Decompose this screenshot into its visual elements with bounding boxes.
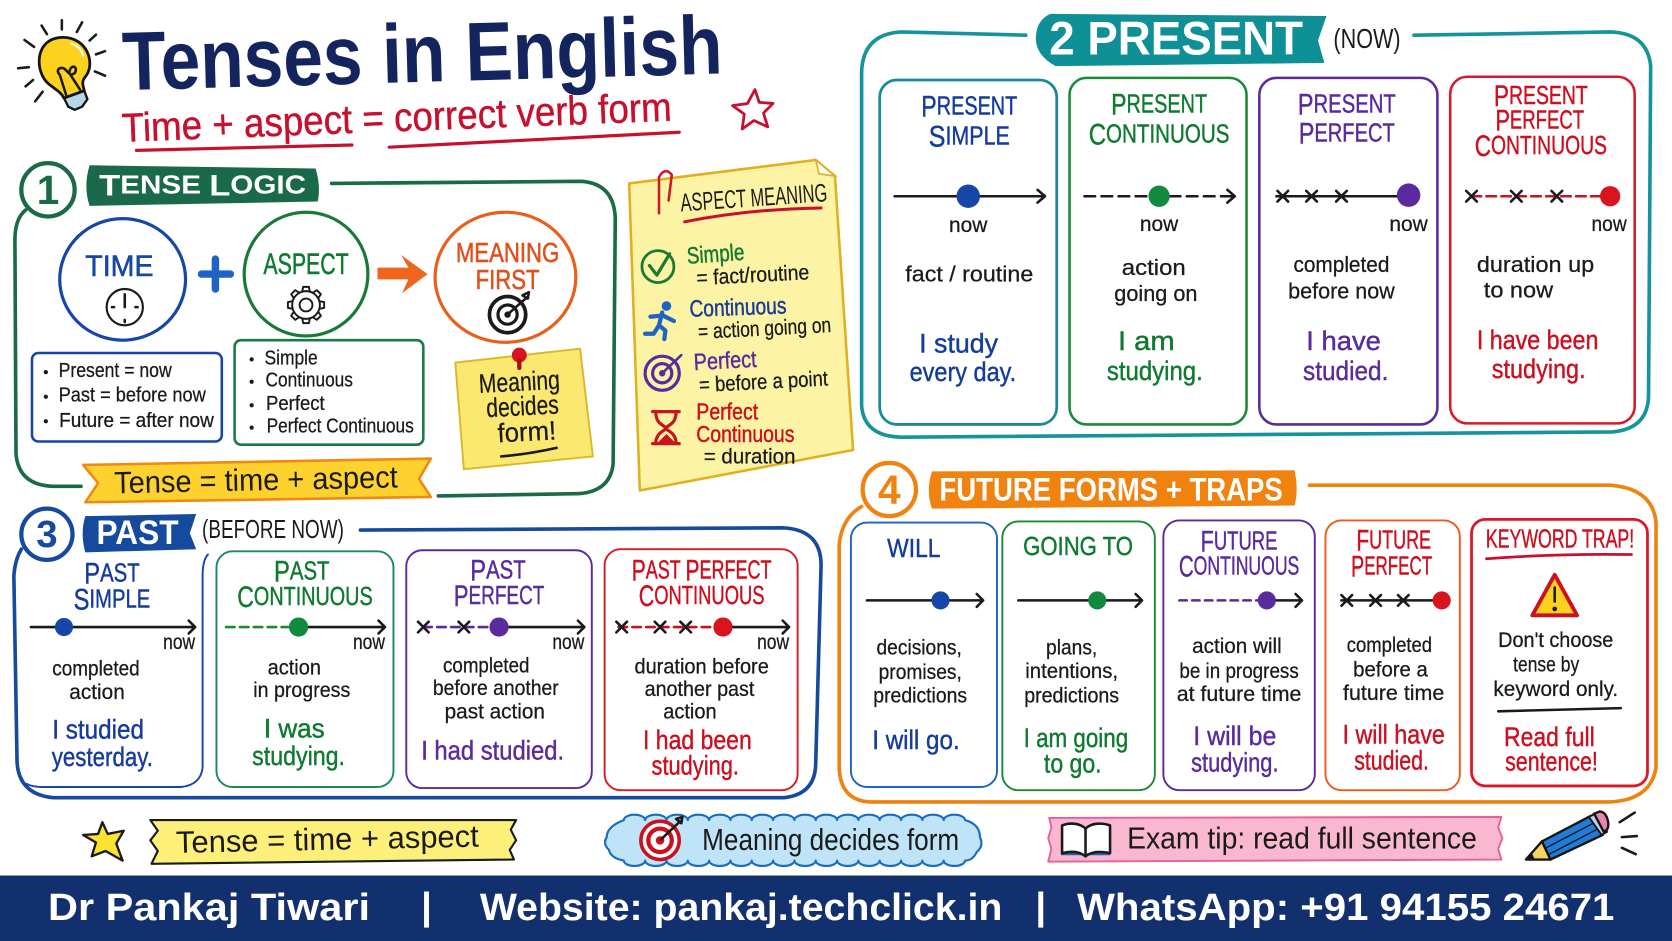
- box: aspect list: [235, 340, 423, 445]
- icon: plus: [202, 259, 230, 289]
- card: going to: to go.: [1044, 749, 1102, 779]
- card: going to: intentions,: [1025, 659, 1118, 683]
- card: keyword trap: Don't choose: [1498, 628, 1613, 652]
- item: perfect: Perfect: [693, 346, 758, 375]
- card: present continuous: going on: [1114, 281, 1197, 306]
- number badge 1: [21, 163, 75, 216]
- footer bar: |: [1035, 885, 1046, 928]
- badge and heading: past: [21, 509, 344, 560]
- card: past simple: I studied: [52, 714, 144, 744]
- card: present perfect: now: [1389, 212, 1428, 236]
- badge: 4: 4: [878, 466, 901, 512]
- card: past continuous: PAST: [274, 555, 330, 588]
- card: present perfect: studied.: [1303, 356, 1388, 386]
- card: present perfect continuous: to now: [1484, 278, 1554, 303]
- card: future perfect: FUTURE: [1356, 524, 1431, 557]
- card: future continuous: action will: [1192, 634, 1282, 658]
- heading: future forms and traps: FUTURE FORMS + TRAPS: [939, 471, 1283, 507]
- heading: aspect meaning: ASPECT MEANING: [680, 179, 828, 217]
- panel: tense logic: [15, 163, 615, 502]
- card: will: promises,: [879, 660, 962, 684]
- card: keyword trap: [1472, 519, 1647, 786]
- badge and heading: past: 3: [36, 513, 58, 556]
- card: future perfect: studied.: [1354, 745, 1429, 775]
- number badge 1: 1: [37, 167, 59, 213]
- card: past perfect: [406, 550, 592, 788]
- card: present perfect continuous: PRESENT: [1494, 79, 1588, 112]
- footer bar: Dr Pankaj Tiwari: [48, 886, 370, 929]
- card: future perfect: I will have: [1343, 720, 1445, 750]
- card: present perfect: PERFECT: [1299, 117, 1395, 150]
- badge: 4: [863, 463, 916, 516]
- icon: open book: [1061, 824, 1110, 856]
- card: keyword trap: sentence!: [1505, 746, 1598, 776]
- footer bar: WhatsApp: +91 94155 24671: [1077, 886, 1614, 929]
- footer bar: Website: pankaj.techclick.in: [480, 886, 1002, 929]
- circle: aspect: ASPECT: [263, 248, 349, 281]
- ribbon: tense reminder: Tense = time + aspect: [176, 819, 480, 860]
- card: past continuous: CONTINUOUS: [237, 581, 373, 614]
- box: aspect list: Perfect: [266, 393, 325, 415]
- card: will: decisions,: [877, 635, 962, 659]
- card: future continuous: FUTURE: [1201, 525, 1277, 558]
- card: present perfect: completed: [1293, 252, 1389, 277]
- item: perfect: [645, 346, 829, 397]
- card: present continuous: action: [1122, 255, 1186, 280]
- icon: target: [641, 817, 682, 860]
- item: simple: Simple: [686, 239, 745, 269]
- item: continuous: [645, 292, 832, 344]
- card: present simple: PRESENT: [921, 90, 1018, 123]
- card: future continuous: CONTINUOUS: [1179, 550, 1299, 583]
- icon: yellow star: [83, 822, 124, 861]
- sticky note: meaning decides form: [455, 348, 593, 469]
- banner: tense equals time plus aspect: Tense = time + aspect: [114, 459, 398, 500]
- card: will: WILL: [887, 535, 941, 563]
- card: keyword trap: keyword only.: [1493, 677, 1618, 701]
- label: now: (NOW): [1333, 23, 1401, 54]
- card: present continuous: now: [1140, 212, 1179, 236]
- card: present continuous: [1070, 78, 1247, 424]
- item: perfect continuous: Continuous: [696, 421, 794, 447]
- card: future perfect: before a: [1353, 658, 1428, 682]
- card: present perfect: before now: [1288, 279, 1396, 304]
- card: past perfect: past action: [445, 699, 545, 723]
- item: simple: [642, 239, 810, 290]
- card: past continuous: studying.: [252, 741, 345, 771]
- panel: present: [862, 12, 1651, 437]
- card: past continuous: [216, 551, 393, 787]
- item: perfect continuous: [653, 399, 795, 468]
- icon: red star: [733, 90, 773, 129]
- card: present simple: [880, 80, 1057, 424]
- panel: future forms and traps: [839, 463, 1656, 802]
- box: time list: Present = now: [59, 360, 172, 382]
- circle: meaning first: [435, 212, 576, 342]
- card: past continuous: now: [353, 630, 385, 654]
- ribbon: exam tip: [1048, 817, 1502, 862]
- card: past perfect continuous: studying.: [652, 751, 739, 781]
- arrow: orange: [377, 255, 428, 293]
- circle: time: TIME: [85, 250, 154, 283]
- heading: tense logic: TENSE LOGIC: [99, 169, 306, 202]
- card: going to: I am going: [1024, 723, 1128, 753]
- card: present perfect: PRESENT: [1298, 88, 1396, 121]
- ribbon: exam tip: Exam tip: read full sentence: [1127, 821, 1477, 856]
- card: past simple: yesterday.: [52, 742, 153, 772]
- card: present continuous: PRESENT: [1111, 88, 1207, 121]
- card: past continuous: in progress: [253, 678, 350, 702]
- card: going to: predictions: [1024, 683, 1119, 707]
- card: past perfect: I had studied.: [421, 736, 564, 766]
- card: future perfect: completed: [1347, 633, 1432, 657]
- cloud: meaning decides form: Meaning decides form: [702, 822, 959, 857]
- card: past perfect continuous: [605, 549, 798, 790]
- card: keyword trap: Read full: [1504, 722, 1595, 752]
- card: present perfect: [1259, 78, 1437, 424]
- card: past simple: now: [163, 630, 196, 654]
- card: will: I will go.: [872, 725, 960, 755]
- card: present simple: now: [949, 213, 988, 237]
- card: future perfect: future time: [1343, 681, 1444, 705]
- circle: aspect: [244, 212, 368, 336]
- card: present perfect continuous: [1450, 77, 1635, 423]
- card: future continuous: I will be: [1193, 721, 1276, 751]
- icon: pencil: [1526, 812, 1637, 860]
- card: going to: plans,: [1046, 635, 1097, 659]
- sticky note: meaning decides form: Meaning: [478, 365, 561, 399]
- icon: light bulb: [18, 20, 105, 110]
- card: past perfect: PERFECT: [454, 580, 545, 613]
- card: future continuous: at future time: [1177, 682, 1301, 706]
- card: present simple: SIMPLE: [929, 120, 1010, 153]
- card: past perfect continuous: PAST PERFECT: [632, 554, 772, 587]
- card: past perfect: completed: [443, 653, 529, 677]
- circle: meaning first: FIRST: [476, 264, 540, 295]
- card: past perfect continuous: I had been: [643, 725, 752, 755]
- card: present simple: every day.: [910, 357, 1016, 387]
- card: past perfect: PAST: [470, 554, 526, 587]
- card: present perfect continuous: CONTINUOUS: [1475, 130, 1607, 163]
- card: past simple: action: [69, 680, 125, 704]
- card: future perfect: PERFECT: [1351, 550, 1432, 583]
- card: past simple: completed: [52, 657, 140, 681]
- card: present perfect continuous: duration up: [1477, 252, 1594, 277]
- card: present perfect continuous: PERFECT: [1496, 104, 1584, 137]
- item: perfect: = before a point: [698, 366, 829, 397]
- card: present perfect continuous: I have been: [1477, 325, 1598, 355]
- card: present perfect continuous: now: [1591, 212, 1627, 236]
- card: past continuous: I was: [264, 713, 325, 743]
- circle: time: [60, 219, 186, 340]
- cloud: meaning decides form: [605, 815, 982, 866]
- item: continuous: Continuous: [689, 292, 787, 322]
- panel: past: [14, 509, 821, 798]
- card: future continuous: be in progress: [1179, 659, 1299, 683]
- item: perfect continuous: Perfect: [696, 399, 759, 425]
- icon: gear: [288, 287, 324, 323]
- card: present perfect continuous: studying.: [1492, 354, 1586, 384]
- footer bar: [0, 876, 1672, 941]
- card: past perfect continuous: another past: [645, 677, 754, 701]
- card: will: predictions: [873, 683, 967, 707]
- box: aspect list: Perfect Continuous: [267, 416, 414, 438]
- card: past perfect: now: [552, 630, 585, 654]
- card: past continuous: action: [268, 656, 321, 680]
- icon: paperclip: [659, 171, 672, 213]
- item: continuous: = action going on: [697, 313, 832, 344]
- box: time list: Past = before now: [59, 385, 206, 407]
- circle: meaning first: MEANING: [456, 237, 559, 268]
- card: past simple: PAST: [84, 557, 140, 590]
- card: present simple: fact / routine: [905, 262, 1033, 287]
- box: time list: Future = after now: [59, 410, 214, 432]
- card: present simple: I study: [919, 328, 999, 358]
- sticky note: meaning decides form: decides: [486, 389, 559, 423]
- card: present continuous: CONTINUOUS: [1089, 118, 1229, 151]
- card: present perfect: I have: [1306, 326, 1381, 356]
- badge and heading: past: (BEFORE NOW): [202, 516, 344, 544]
- heading: aspect meaning: [680, 179, 828, 222]
- card: past perfect continuous: now: [757, 630, 790, 654]
- card: will: [851, 523, 997, 787]
- card: going to: GOING TO: [1023, 533, 1133, 561]
- card: future perfect: [1325, 520, 1460, 790]
- card: past perfect continuous: duration before: [634, 655, 769, 679]
- badge and heading: past: PAST: [97, 514, 179, 552]
- card: past perfect: before another: [433, 676, 559, 700]
- card: past simple: [27, 555, 208, 787]
- card: past simple: SIMPLE: [74, 583, 150, 616]
- item: simple: = fact/routine: [696, 260, 810, 290]
- box: time list: [32, 353, 222, 441]
- card: future continuous: [1163, 520, 1315, 790]
- sticky note: meaning decides form: form!: [497, 415, 557, 448]
- heading: tense logic: [86, 165, 319, 206]
- heading: present: 2 PRESENT: [1049, 12, 1303, 64]
- card: past perfect continuous: action: [663, 699, 717, 723]
- card: past perfect continuous: CONTINUOUS: [639, 580, 765, 613]
- box: aspect list: Simple: [264, 347, 318, 369]
- card: present continuous: I am: [1118, 326, 1175, 356]
- card: keyword trap: tense by: [1513, 652, 1580, 676]
- card: going to: [1002, 521, 1155, 790]
- subtitle: Time + aspect = correct verb form: [121, 84, 672, 151]
- card: present continuous: studying.: [1107, 356, 1203, 386]
- card: future continuous: studying.: [1191, 747, 1279, 777]
- panel: aspect meaning note: [629, 160, 853, 491]
- item: perfect continuous: = duration: [704, 444, 795, 468]
- footer bar: |: [421, 885, 432, 928]
- box: aspect list: Continuous: [266, 370, 353, 392]
